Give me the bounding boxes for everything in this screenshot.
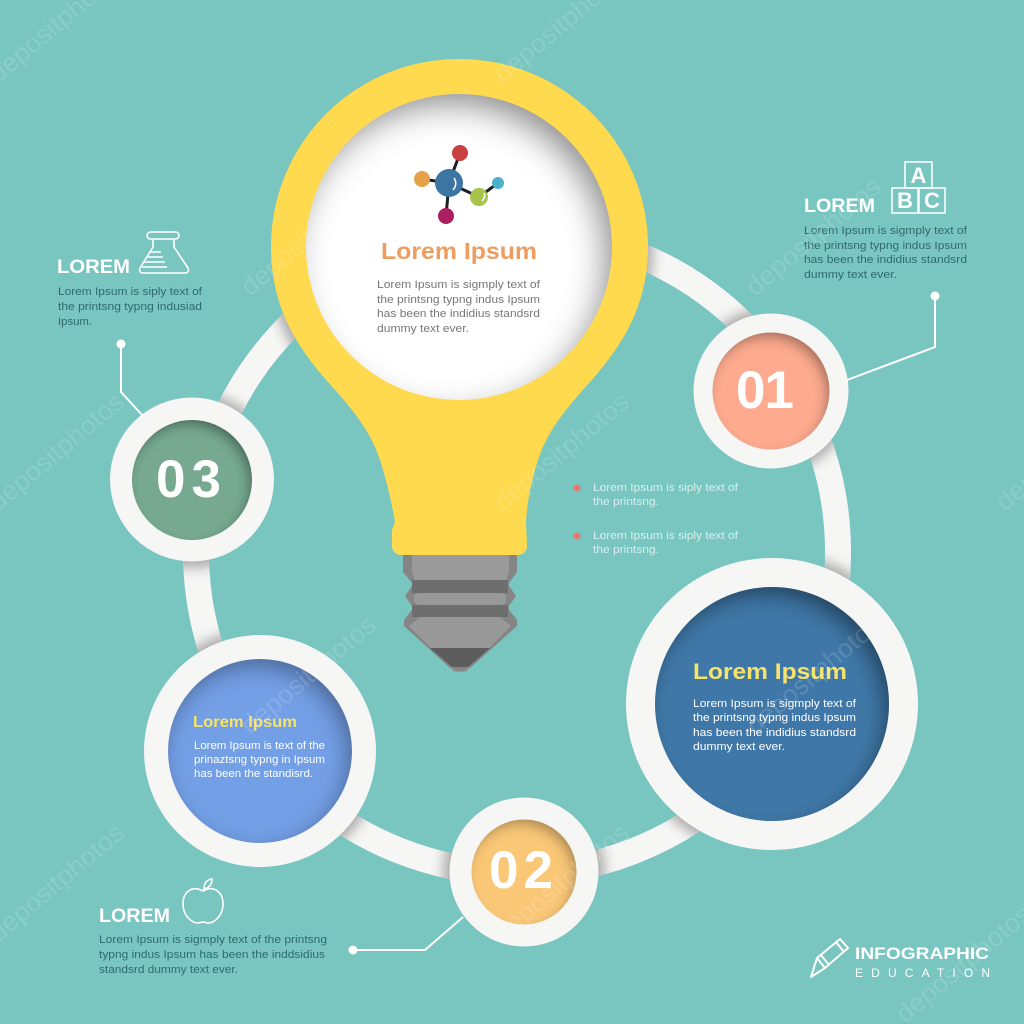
body text <box>194 740 325 780</box>
body text <box>804 225 968 281</box>
bulb glass <box>271 59 648 555</box>
heading: Lorem Ipsum <box>381 238 537 264</box>
bullet notes: Lorem Ipsum is siply text of <box>593 530 739 542</box>
body text: Ipsum. <box>58 316 92 328</box>
label: LOREM <box>99 905 170 927</box>
watermark: depositphotos <box>488 817 635 948</box>
body text: has been the indidius standsrd <box>377 308 540 320</box>
icon: ABC blocks: C <box>924 188 940 213</box>
watermark: depositphotos <box>740 171 887 302</box>
body text: has been the indidius standsrd <box>693 727 856 739</box>
body text: the printsng typng indus Ipsum <box>804 240 967 252</box>
icon: pencil <box>811 939 848 977</box>
heading: Lorem Ipsum <box>693 659 847 684</box>
number 02: 02 <box>489 841 553 900</box>
connector: 01 <box>847 292 940 380</box>
body text <box>693 698 857 753</box>
icon: molecule <box>414 145 504 224</box>
circle 03 <box>110 398 274 562</box>
circle 02 <box>450 798 598 946</box>
body text: prinaztsng typng in Ipsum <box>194 754 325 766</box>
number 01: 01 <box>736 361 794 420</box>
watermark: depositphotos <box>235 609 382 740</box>
body text: has been the indidius standsrd <box>804 254 967 266</box>
icon: ABC blocks <box>892 162 945 213</box>
bullet notes: Lorem Ipsum is siply text of <box>593 482 739 494</box>
body text: Lorem Ipsum is sigmply text of <box>804 225 968 237</box>
brand title: INFOGRAPHIC <box>855 945 989 963</box>
connecting ring <box>183 244 851 880</box>
number 03: 03 <box>156 450 221 509</box>
body text: the printsng typng indus Ipsum <box>693 712 856 724</box>
watermark: depositphotos <box>235 171 382 302</box>
body text: has been the standisrd. <box>194 768 313 780</box>
heading: Lorem Ipsum <box>193 714 297 731</box>
callout: top left <box>57 232 203 328</box>
label: LOREM <box>57 256 130 278</box>
callout: bottom left <box>99 879 327 976</box>
light bulb <box>267 59 648 672</box>
bullet notes <box>574 482 739 556</box>
body text <box>377 279 541 335</box>
body text <box>58 286 203 328</box>
body text: dummy text ever. <box>377 323 469 335</box>
body text: typng indus Ipsum has been the inddsidius <box>99 949 326 961</box>
brand subtitle: EDUCATION <box>855 966 990 980</box>
body text: Lorem Ipsum is siply text of <box>58 286 203 298</box>
bulb base <box>403 552 517 672</box>
connector: 02 <box>348 917 463 954</box>
logo: infographic education <box>811 939 990 980</box>
icon: flask <box>140 232 188 273</box>
icon: ABC blocks: A <box>911 163 927 188</box>
body text: Lorem Ipsum is sigmply text of the printsng <box>99 934 327 946</box>
body text: Lorem Ipsum is sigmply text of <box>377 279 541 291</box>
body text: the printsng typng indusiad <box>58 301 202 313</box>
watermark: depositphotos <box>740 609 887 740</box>
body text: Lorem Ipsum is sigmply text of <box>693 698 857 710</box>
panel: small blue circle <box>144 635 376 867</box>
bullet notes: the printsng. <box>593 544 659 556</box>
body text: Lorem Ipsum is text of the <box>194 740 325 752</box>
icon: apple <box>183 879 223 923</box>
connector: 03 <box>116 340 143 416</box>
bullet notes: the printsng. <box>593 496 659 508</box>
bulb inner window <box>306 94 612 400</box>
panel: large blue circle <box>626 558 918 851</box>
circle 01 <box>694 314 850 470</box>
body text: the printsng typng indus Ipsum <box>377 294 540 306</box>
body text: dummy text ever. <box>693 741 785 753</box>
label: LOREM <box>804 195 875 217</box>
body text: dummy text ever. <box>804 269 897 281</box>
body text: standsrd dummy text ever. <box>99 964 238 976</box>
icon: ABC blocks: B <box>897 188 913 213</box>
body text <box>99 934 327 976</box>
watermark: depositphotos <box>488 386 635 517</box>
callout: top right <box>804 162 968 281</box>
